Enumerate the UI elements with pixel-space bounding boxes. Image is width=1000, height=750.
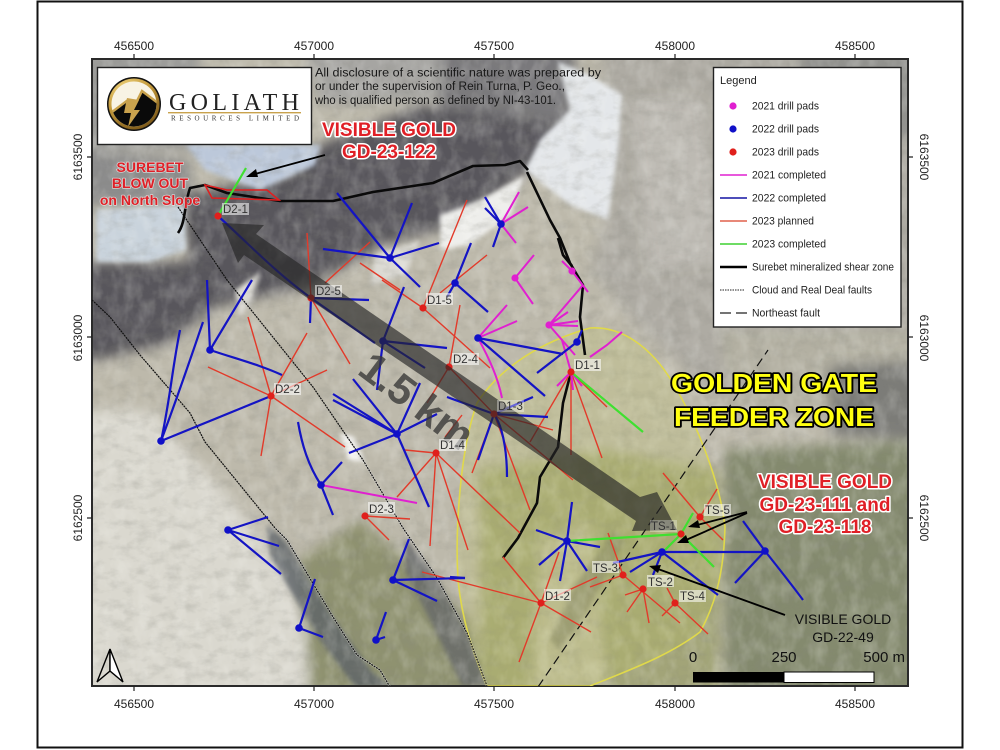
callout: visible gold GD-23-111 and GD-23-118: VISIBLE GOLD: [758, 472, 892, 493]
drill pads 2022: [157, 220, 769, 644]
callout: visible gold GD-22-49: VISIBLE GOLD: [795, 611, 891, 627]
callout: surebet blow out: on North Slope: [100, 192, 200, 208]
drill pad labels: D1-4: [440, 440, 466, 452]
2023 completed lines: [218, 168, 714, 567]
drill pad labels: TS-5: [705, 505, 730, 517]
callout: surebet blow out: [100, 159, 200, 208]
2023 planned lines: [208, 200, 723, 662]
drill pad labels: D2-5: [316, 286, 341, 298]
axis labels: 456500: [114, 39, 154, 53]
legend entry: 2023 completed: [720, 238, 826, 250]
callout: visible gold GD-23-122: [322, 120, 456, 163]
shear zone: [178, 161, 585, 558]
legend entry: 2023 planned: 2023 planned: [752, 216, 814, 228]
axis labels: 6163000: [71, 314, 85, 361]
logo rule: [168, 112, 301, 113]
axis labels: 458500: [835, 697, 875, 711]
axis labels: 457000: [294, 39, 334, 53]
drill pad labels: D1-5: [427, 295, 452, 307]
drill pads 2023: [214, 212, 704, 607]
drill pad labels: D1-2: [545, 591, 570, 603]
axis labels: 456500: [114, 697, 154, 711]
northeast fault: [538, 350, 768, 687]
drill pad labels: D2-3: [369, 504, 394, 516]
disclosure text: who is qualified person as defined by NI-43-101.: [314, 95, 556, 107]
axis ticks: [87, 54, 913, 691]
axis labels: 458500: [835, 39, 875, 53]
logo wordmark: GOLIATH: [169, 90, 299, 116]
surebet blow out outline: [205, 185, 279, 200]
disclosure text: [314, 68, 601, 107]
north arrow: [97, 649, 123, 682]
drill pad labels: D1-1: [575, 360, 600, 372]
drill pads 2021: [511, 267, 576, 329]
callout arrowheads: [246, 169, 700, 573]
axis labels: 458000: [655, 697, 695, 711]
drill pad labels: D2-4: [453, 354, 479, 366]
2021 completed lines: [321, 192, 622, 503]
legend entry: 2023 completed: 2023 completed: [752, 238, 826, 250]
callout arrows: [255, 155, 785, 615]
callout: visible gold GD-23-111 and GD-23-118: GD-23-118: [779, 517, 871, 538]
drill pad labels: [222, 203, 731, 603]
legend entry: 2022 drill pads: 2022 drill pads: [752, 124, 819, 136]
callout: visible gold GD-22-49: GD-22-49: [812, 629, 874, 645]
axis labels: 6162500: [917, 495, 931, 542]
drill pad labels: TS-1: [651, 521, 676, 533]
callout: visible gold GD-23-122: GD-23-122: [342, 142, 436, 163]
drill pad labels: TS-3: [593, 563, 618, 575]
callout: visible gold GD-23-122: VISIBLE GOLD: [322, 120, 456, 141]
logo subtitle: RESOURCES LIMITED: [171, 114, 299, 122]
legend entry: cloud and real deal faults: Cloud and Real Deal faults: [752, 284, 872, 296]
axis labels: 457500: [474, 39, 514, 53]
legend entry: 2022 completed: [720, 192, 826, 204]
terrain imagery: [80, 40, 930, 700]
callout: visible gold GD-23-111 and GD-23-118: GD-23-111 and: [760, 495, 890, 516]
drill pad labels: TS-2: [648, 577, 673, 589]
map overlays: [92, 155, 905, 687]
feeder zone outline: [457, 328, 725, 686]
zone title: golden gate feeder zone: FEEDER ZONE: [674, 402, 874, 432]
axis labels: 457000: [294, 697, 334, 711]
1.5 km double arrow: [222, 223, 677, 531]
drill pad labels: D2-1: [223, 204, 248, 216]
axis labels: 6163500: [71, 133, 85, 180]
axis labels: 6162500: [71, 494, 85, 541]
2022 completed lines: [161, 193, 803, 640]
map border: [92, 59, 908, 686]
scale bar: 0: [689, 649, 697, 666]
axis labels: [71, 39, 931, 711]
drill pad labels: TS-4: [680, 591, 706, 603]
zone title: golden gate feeder zone: GOLDEN GATE: [671, 368, 877, 398]
legend: [714, 68, 901, 327]
legend entry: 2023 drill pads: 2023 drill pads: [752, 146, 819, 158]
legend entry: northeast fault: [720, 308, 820, 320]
disclosure text: All disclosure of a scientific nature was prepared by: [315, 68, 601, 80]
disclosure text: or under the supervision of Rein Turna, P. Geo.,: [315, 81, 565, 93]
zone title: golden gate feeder zone: [671, 368, 877, 432]
callout: visible gold GD-23-111 and GD-23-118: [758, 472, 892, 538]
callout: surebet blow out: BLOW OUT: [112, 175, 189, 191]
callout: visible gold GD-22-49: [795, 611, 891, 645]
axis labels: 6163500: [917, 134, 931, 181]
logo emblem: [107, 77, 161, 131]
drill pad labels: D2-2: [275, 384, 300, 396]
logo panel: [98, 68, 312, 144]
axis labels: 458000: [655, 39, 695, 53]
legend title: Legend: [720, 75, 757, 87]
scale bar: 500 m: [863, 649, 905, 666]
1.5 km label: 1.5 km: [351, 343, 483, 459]
callout: surebet blow out: SUREBET: [117, 159, 184, 175]
legend entry: 2021 drill pads: 2021 drill pads: [752, 100, 819, 112]
legend entry: 2023 planned: [720, 216, 814, 228]
legend entry: 2022 completed: 2022 completed: [752, 192, 826, 204]
axis labels: 6163000: [917, 315, 931, 362]
axis labels: 457500: [474, 697, 514, 711]
map panel: [80, 40, 930, 700]
legend entry: 2021 completed: 2021 completed: [752, 170, 826, 182]
legend entry: surebet shear zone: Surebet mineralized shear zone: [752, 262, 894, 274]
scale bar: 250: [771, 649, 797, 666]
scale bar: [689, 649, 905, 682]
drill pad labels: D1-3: [498, 401, 523, 413]
legend entry: northeast fault: Northeast fault: [752, 308, 820, 320]
legend entry: 2021 completed: [720, 170, 826, 182]
cloud and real deal faults: [92, 207, 487, 687]
